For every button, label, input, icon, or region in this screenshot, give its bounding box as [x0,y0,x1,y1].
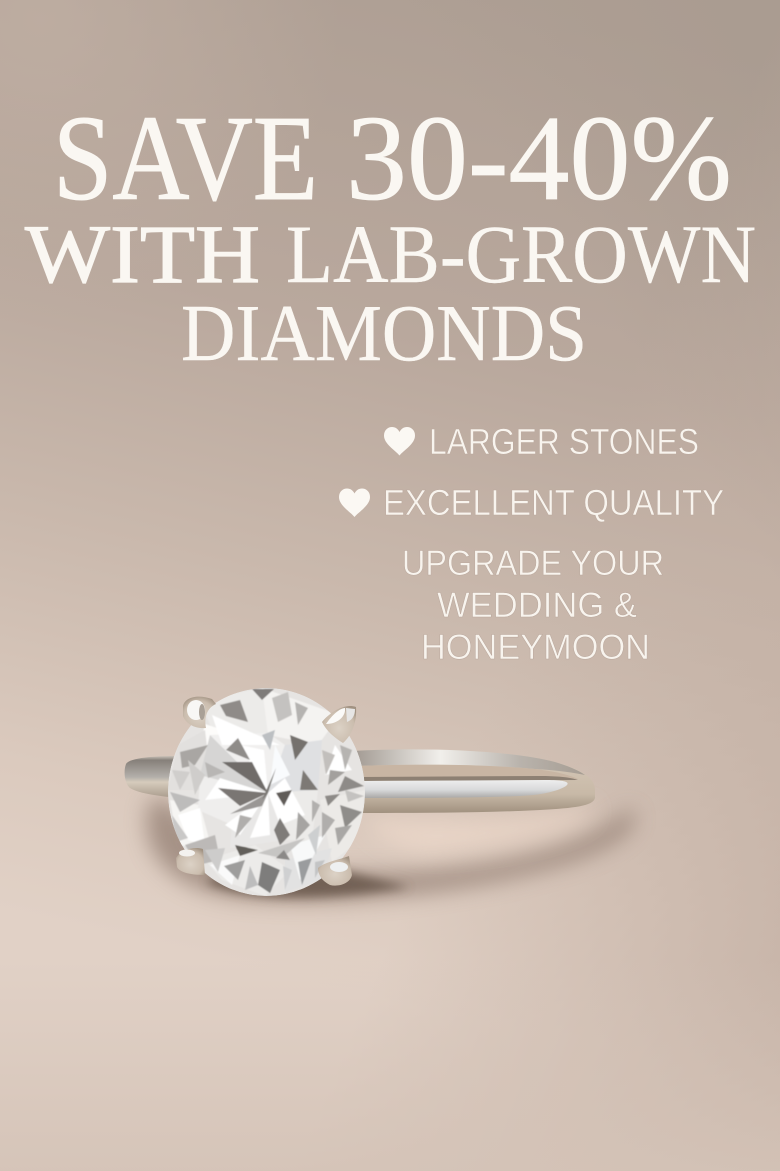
dark pavilion wedges [222,762,268,793]
bright rays [242,746,268,790]
headline line 2 [25,208,756,300]
headline line 1: SAVE [53,91,318,226]
benefit: excellent quality: EXCELLENT QUALITY [383,482,724,523]
icon: heart [339,488,370,517]
dark seam [360,776,578,781]
icon: heart [384,427,415,456]
gray facets outer [252,689,274,700]
star table [212,735,284,786]
crown facets [216,688,262,722]
headline line 1 [53,91,732,226]
headline line 2: LAB-GROWN [286,208,756,300]
diamond [168,688,365,896]
ring band: left [125,756,178,798]
band body [352,749,595,813]
benefit: larger stones: LARGER STONES [429,421,699,462]
ring shadow [147,800,634,901]
prong: top left [183,697,216,728]
benefit: upgrade your wedding and honeymoon: UPGRADE YOUR [402,544,664,583]
benefit: upgrade your wedding and honeymoon [402,544,664,667]
benefit: upgrade your wedding and honeymoon: HONEYMOON [421,628,650,667]
title: savings headline [25,91,756,378]
inner surface [352,765,578,779]
ring illustration [125,688,634,901]
prong: bottom right [318,856,352,886]
benefit: upgrade your wedding and honeymoon: WEDDING & [437,586,637,625]
benefits list [339,421,724,667]
headline line 2: WITH [25,208,260,300]
back arc highlight [352,749,585,775]
ring band: right section with back arc and front tube [352,749,595,813]
prong: top right [322,706,356,743]
prong: bottom left [176,848,205,875]
headline line 1: 30-40% [346,91,732,226]
headline line 3: DIAMONDS [181,288,587,378]
band reflection [362,780,568,798]
